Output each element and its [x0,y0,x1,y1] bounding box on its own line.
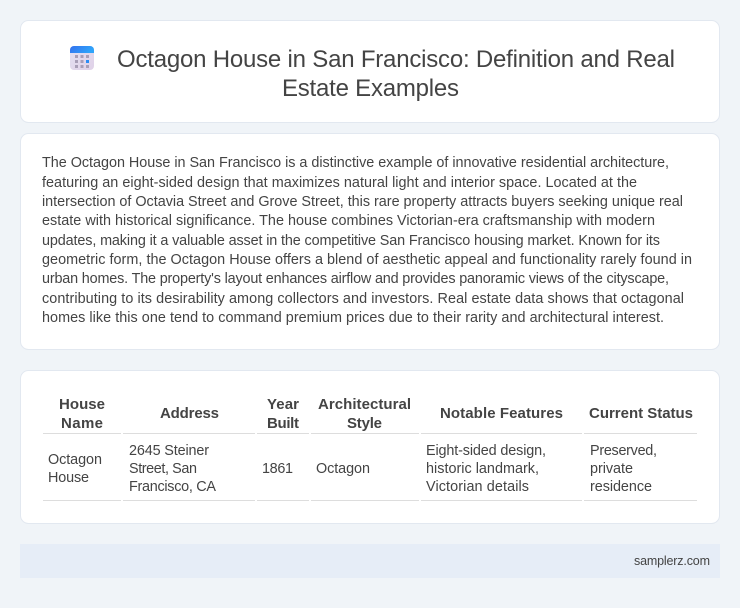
table data row: Victorian details [426,479,529,495]
footer bar [20,544,720,578]
text block: description paragraph: geometric form, the Octagon House offers a blend of aesthetic appeal and functionality rarely found in [42,252,692,268]
text block: description paragraph: updates, making it a valuable asset in the competitive San Francisco housing market. Known for its [42,233,660,249]
table data row: Octagon [48,452,102,468]
table data row: residence [590,479,652,495]
table header row: Style [347,415,382,432]
table data row: 2645 Steiner [129,443,209,459]
table data row: Eight-sided design, [426,443,546,459]
table data row: 1861 [262,461,293,477]
text block: description paragraph: homes like this one tend to command premium prices due to their rarity and architectural interest. [42,310,664,326]
text block: description paragraph: The Octagon House in San Francisco is a distinctive example of innovative residential architecture, [42,155,669,171]
table header row: Built [267,415,299,432]
text block: description paragraph: contributing to its desirability among collectors and investors. Real estate data shows that octagonal [42,291,684,307]
table data row: Preserved, [590,443,657,459]
icon: calendar [70,46,94,70]
table header row [43,396,697,434]
table data row: Francisco, CA [129,479,216,495]
heading: title: Estate Examples [282,75,459,102]
text block: description paragraph [42,155,692,326]
text block: description paragraph: intersection of Octavia Street and Grove Street, this rare property attracts buyers seeking unique real [42,194,683,210]
table data row: Street, San [129,461,197,477]
text block: description paragraph: featuring an eight-sided design that maximizes natural light and interior space. Located at the [42,175,637,191]
panel: description [20,134,720,350]
table header row: Year [267,396,299,413]
panel: data table [20,370,720,524]
table header row: Notable Features [440,405,563,422]
table data row: private [590,461,633,477]
table data row: Octagon [316,461,370,477]
table header row: Address [160,405,219,422]
heading: title: Octagon House in San Francisco: Definition and Real [117,46,675,73]
table data row: historic landmark, [426,461,539,477]
text block: description paragraph: urban homes. The property's layout enhances airflow and provides panoramic views of the cityscape, [42,271,669,287]
footer text: samplerz.com [634,554,710,568]
table header row: Name [61,415,103,432]
table data row [43,443,697,501]
table data row: House [48,470,89,486]
table header row: Architectural [318,396,411,413]
text block: description paragraph: estate with historical significance. The house combines Victorian-era craftsmanship with modern [42,213,655,229]
heading: title [117,46,675,102]
table header row: House [59,396,105,413]
table header row: Current Status [589,405,693,422]
panel: title card [20,20,720,122]
